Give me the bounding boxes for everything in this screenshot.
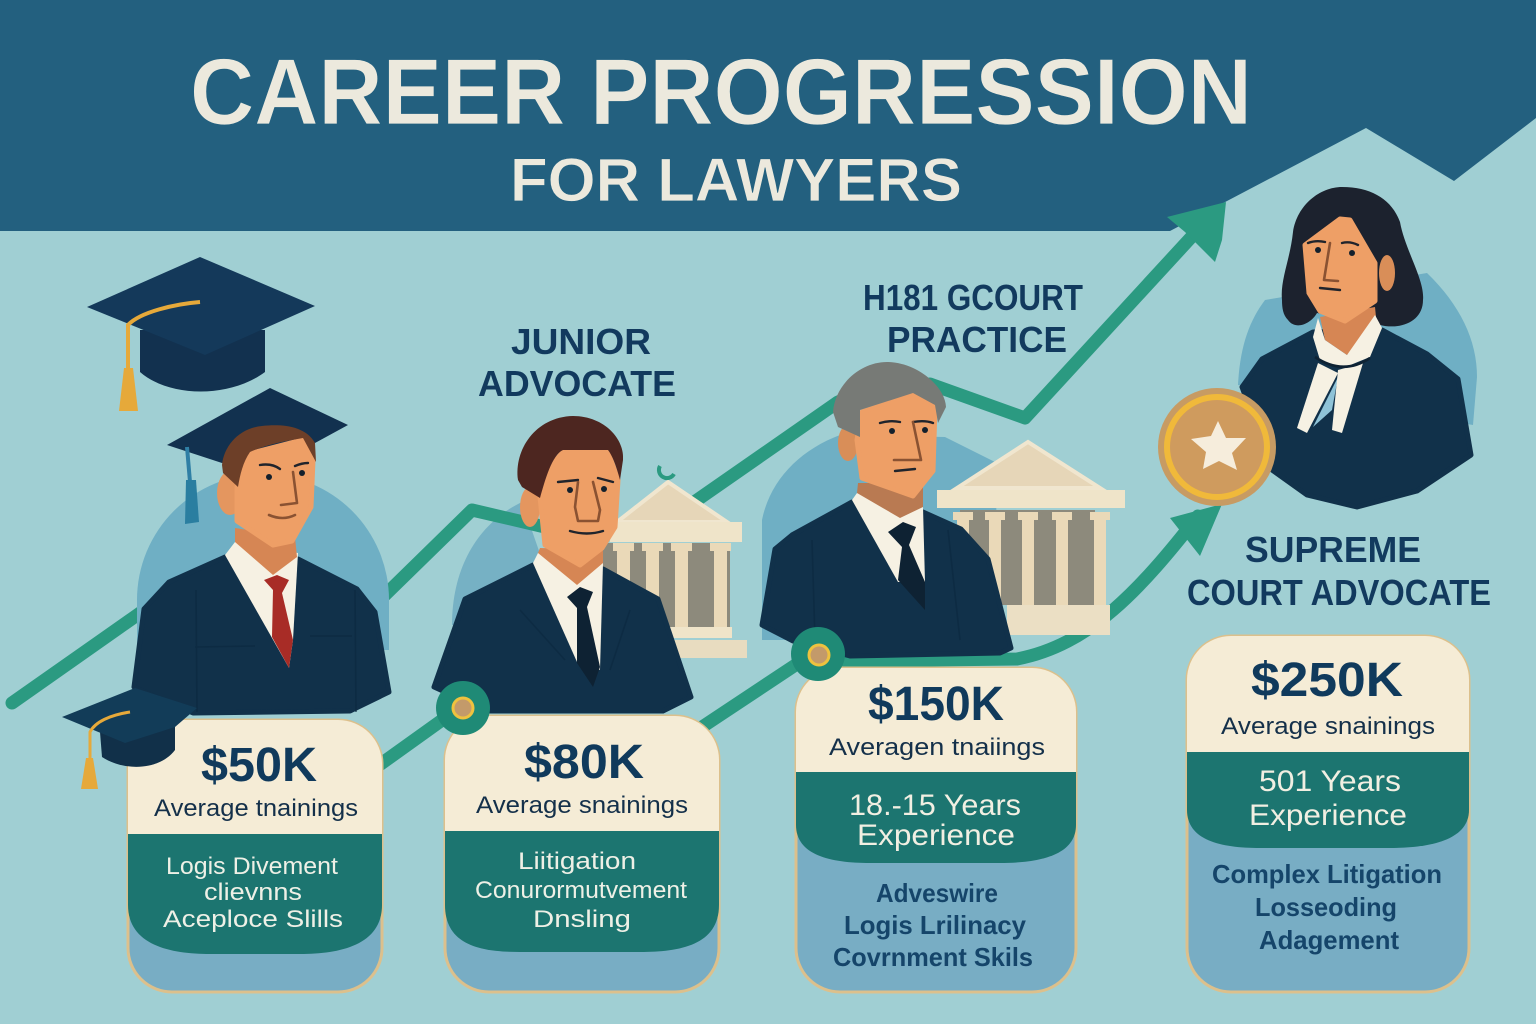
icon: courthouse 2 xyxy=(937,442,1125,635)
person 4: supreme court advocate xyxy=(1238,187,1477,507)
card 2: Dnsling xyxy=(533,906,631,933)
heading: junior advocate xyxy=(478,321,676,404)
card 1: Average tnainings xyxy=(154,795,358,822)
heading: high court practice: PRACTICE xyxy=(887,319,1067,360)
card 2: Conurormutvement xyxy=(475,877,687,904)
card 2: Liitigation xyxy=(518,848,636,875)
card 3: Logis Lrilinacy xyxy=(844,910,1027,940)
card 3: Experience xyxy=(857,819,1015,852)
backdrop: junior advocate xyxy=(452,502,570,640)
person 2: junior advocate xyxy=(434,416,691,711)
card 1 xyxy=(128,720,382,992)
heading: high court practice xyxy=(863,277,1083,360)
heading: supreme court advocate: SUPREME xyxy=(1245,529,1421,570)
card 2: $80K xyxy=(524,736,644,789)
heading: supreme court advocate xyxy=(1187,529,1491,613)
heading: junior advocate: ADVOCATE xyxy=(478,363,676,404)
card 4: Complex Litigation xyxy=(1212,859,1442,889)
heading: supreme court advocate: COURT ADVOCATE xyxy=(1187,572,1491,613)
title: CAREER PROGRESSION xyxy=(190,39,1252,144)
card 2 xyxy=(445,716,719,992)
card 4: 501 Years xyxy=(1259,765,1401,798)
person 1: graduate xyxy=(134,388,389,713)
arrowhead top xyxy=(1167,202,1226,262)
graduation cap large xyxy=(87,257,315,411)
growth arrow xyxy=(12,202,1226,766)
milestone node 1 xyxy=(436,681,490,735)
icon: courthouse 1 xyxy=(603,466,747,658)
arrowhead lower xyxy=(1170,504,1222,556)
subtitle: FOR LAWYERS xyxy=(510,146,962,214)
card 4: Losseoding xyxy=(1255,892,1397,922)
heading: junior advocate: JUNIOR xyxy=(511,321,651,362)
milestone node 2 xyxy=(791,627,845,681)
card 4: Average snainings xyxy=(1221,713,1435,740)
heading: high court practice: H181 GCOURT xyxy=(863,277,1083,318)
card 2: Average snainings xyxy=(476,792,688,819)
card 1: Aceploce Slills xyxy=(163,906,343,933)
card 4: Adagement xyxy=(1259,925,1399,955)
card 1: Logis Divement xyxy=(166,853,338,880)
card 1: clievnns xyxy=(204,879,302,906)
card 3: Covrnment Skils xyxy=(833,942,1033,972)
card 3: $150K xyxy=(868,678,1004,731)
card 3 xyxy=(796,668,1076,992)
card 3: Adveswire xyxy=(876,878,998,908)
card 4: Experience xyxy=(1249,799,1407,832)
graduation cap small xyxy=(62,688,197,789)
card 4 xyxy=(1187,636,1469,992)
card 4: $250K xyxy=(1251,654,1403,707)
icon: gold medal xyxy=(1158,388,1276,506)
header banner xyxy=(0,0,1536,231)
person 3: high court practice xyxy=(762,362,1011,656)
backdrop: high court practice xyxy=(762,435,1000,640)
card 1: $50K xyxy=(201,739,317,792)
card 3: 18.-15 Years xyxy=(849,789,1021,822)
card 3: Averagen tnaiings xyxy=(829,734,1045,761)
